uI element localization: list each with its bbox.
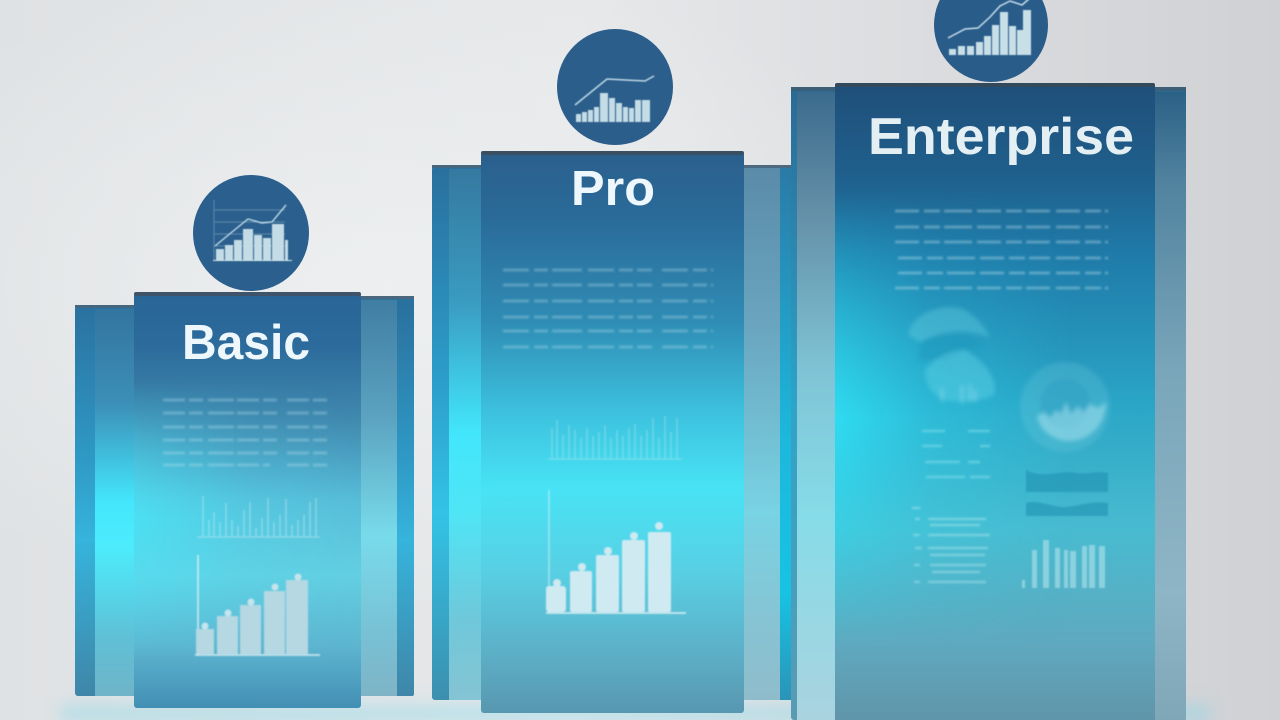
list lines: Enterprise lower [912,508,990,582]
heading: Enterprise: Enterprise [868,108,1134,166]
text block: Basic features [163,400,327,465]
back slab: Basic [75,296,414,696]
heading: Basic: Basic [182,316,310,370]
icon: Pro chart badge [557,29,673,145]
front slab: Pro [481,151,744,713]
front slab: Enterprise [835,83,1155,720]
area chart: Enterprise bottom [1026,502,1108,516]
text block: Pro features [503,270,713,347]
vertical axis rule: Enterprise [895,300,897,430]
bar chart: Basic [195,555,320,655]
panel: Enterprise tier [791,0,1186,720]
bar chart: Pro [546,490,686,613]
line chart: Pro [548,416,682,459]
panel: Pro tier [432,29,791,713]
panel: Basic tier [75,175,414,708]
icon: Basic chart badge [193,175,309,291]
donut chart: Enterprise right [1020,362,1110,452]
front slab: Basic [134,292,361,708]
caption: Basic [215,669,281,675]
text block: Enterprise features [895,211,1108,288]
area chart: Enterprise top [1026,470,1108,492]
heading: Pro: Pro [571,162,655,216]
caption: Enterprise [957,650,1066,652]
floor glow [60,698,1210,720]
back slab: Enterprise [791,87,1186,720]
icon: Enterprise chart badge [934,0,1048,82]
radial chart: Enterprise left [908,307,995,404]
back slab: Pro [432,165,791,700]
line chart: Basic [197,496,320,537]
list lines: Enterprise upper [922,431,990,477]
caption: Pro [572,628,651,636]
bar chart: Enterprise [1022,540,1105,588]
